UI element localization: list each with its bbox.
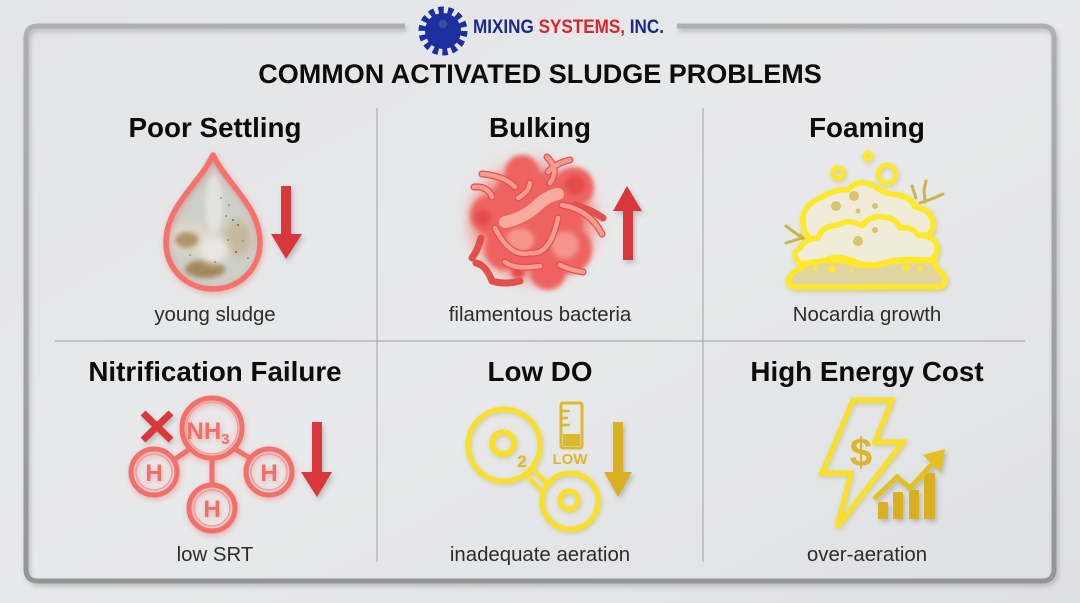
icon: lightning bolt with dollar: $ — [850, 431, 872, 475]
icon: blue gear — [422, 10, 464, 52]
top cloud — [803, 183, 933, 255]
heading: Foaming — [809, 112, 925, 143]
foam holes — [831, 191, 878, 246]
heading: Bulking — [489, 112, 591, 143]
icon: NH3 molecule: H — [260, 460, 278, 487]
logo: Mixing Systems, Inc. — [422, 10, 664, 52]
icon: foam cloud — [786, 152, 945, 287]
heading: Low DO — [488, 356, 592, 387]
arrow: down — [301, 422, 332, 497]
label: inadequate aeration — [450, 544, 630, 566]
icon: rising cost chart — [874, 449, 945, 519]
label: young sludge — [154, 304, 276, 326]
panel: nitrification failure — [88, 356, 342, 566]
bubbles — [832, 152, 896, 183]
panel: bulking — [449, 112, 642, 326]
icon: NH3 molecule: H — [203, 496, 221, 523]
panel: poor settling — [129, 112, 302, 326]
icon: NH3 molecule — [131, 398, 292, 531]
icon: lightning bolt with dollar — [822, 400, 903, 527]
arrow: up — [613, 186, 642, 260]
icon: O2 molecule — [468, 409, 598, 529]
heading: Poor Settling — [129, 112, 301, 143]
panel: high energy cost — [750, 356, 984, 566]
panel: low DO — [450, 356, 632, 566]
label: Nocardia growth — [793, 304, 941, 326]
icon: O2 molecule: 2 — [517, 452, 527, 471]
bottom cloud — [788, 260, 945, 287]
label: filamentous bacteria — [449, 304, 632, 326]
middle cloud — [795, 217, 937, 265]
logo wordmark: MIXING SYSTEMS, INC. — [473, 16, 664, 38]
heading: High Energy Cost — [750, 356, 984, 387]
label: low SRT — [177, 544, 253, 566]
heading: Nitrification Failure — [88, 356, 342, 387]
divider lines — [55, 108, 1025, 562]
branches — [786, 181, 943, 243]
icon: NH3 molecule: H — [145, 460, 163, 487]
icon: sludge droplet — [160, 150, 265, 295]
icon: NH3 molecule: NH — [186, 418, 221, 445]
arrow: down — [271, 186, 302, 259]
icon: low gauge: LOW — [552, 451, 588, 468]
icon: filamentous bacteria — [470, 155, 603, 290]
icon: low gauge — [552, 403, 588, 468]
icon: X mark — [143, 413, 171, 440]
panel: foaming — [786, 112, 945, 326]
title: COMMON ACTIVATED SLUDGE PROBLEMS — [258, 59, 822, 89]
arrow: down — [604, 422, 632, 497]
icon: NH3 molecule: 3 — [221, 431, 230, 448]
label: over-aeration — [807, 544, 927, 566]
